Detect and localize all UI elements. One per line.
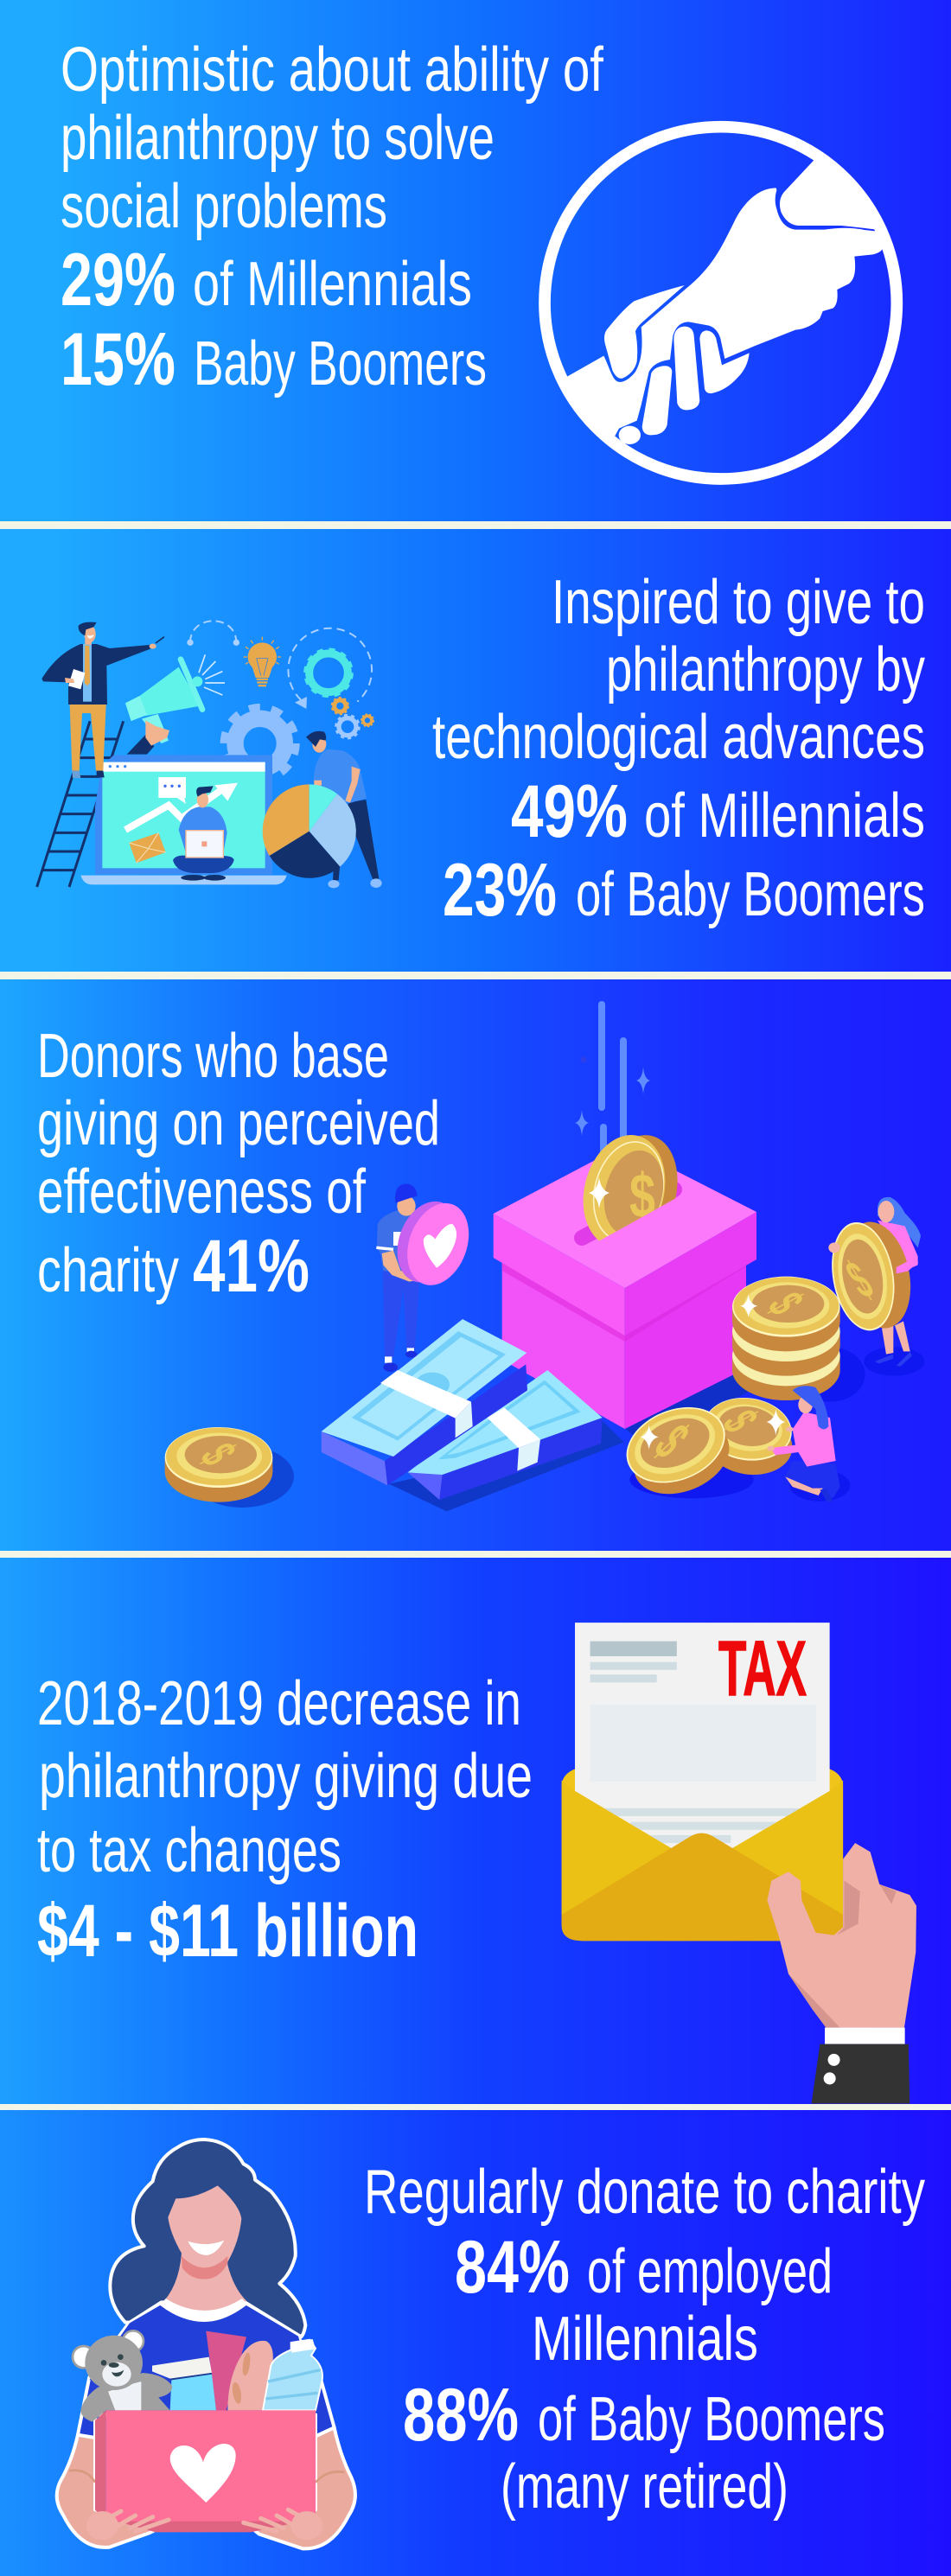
text: tax decrease statistic: philanthropy giving due (39, 1742, 533, 1811)
pink item (206, 2331, 246, 2410)
laptop (80, 755, 287, 884)
text: optimism statistics: of Millennials (193, 250, 472, 319)
text: tax decrease statistic: 2018-2019 decrease in (37, 1669, 521, 1738)
icon: big gear (224, 707, 296, 780)
text: donation statistics: 88% (403, 2374, 519, 2457)
icon: megaphone (125, 654, 225, 743)
coins and people on the right (615, 1197, 921, 1508)
coin on ground: rear (699, 1393, 796, 1480)
text: donation statistics: Millennials (532, 2305, 758, 2374)
figure: person with heart (376, 1183, 480, 1372)
panel: optimism about philanthropy (0, 0, 951, 521)
figure: man on ladder (41, 622, 164, 778)
figure: standing man (306, 731, 382, 888)
elbow creases (69, 2471, 344, 2483)
dashed arcs (190, 621, 372, 702)
figure: woman with big coin (824, 1197, 921, 1367)
text: effectiveness statistic: charity (37, 1236, 179, 1305)
chat bubble (158, 777, 186, 804)
text: optimism statistics: Baby Boomers (194, 329, 487, 399)
text: donation statistics (364, 2158, 925, 2522)
lone coin (165, 1427, 294, 1508)
shirt (78, 2304, 335, 2438)
donation box (494, 1145, 756, 1429)
text: optimism statistics: Optimistic about ability of (61, 35, 604, 105)
coin stack: $ (756, 1285, 815, 1323)
figure: sitting person with laptop (173, 786, 234, 881)
text: donation statistics: (many retired) (501, 2452, 788, 2522)
text: effectiveness statistic: effectiveness of (37, 1157, 367, 1227)
panel: technological inspiration (0, 529, 951, 972)
illustration: team with megaphone, laptop, gears and pie chart (37, 621, 382, 888)
text: tax decrease statistic (37, 1669, 533, 1973)
coin on ground: front (615, 1393, 740, 1508)
donation box (95, 2410, 316, 2532)
envelope (129, 832, 166, 863)
text: optimism statistics: philanthropy to solve (61, 104, 495, 173)
smile (188, 2241, 224, 2255)
text: donation statistics: 84% (455, 2226, 570, 2309)
icon: light bulb (244, 637, 281, 686)
text: optimism statistics (61, 35, 604, 401)
hand (767, 1843, 916, 2028)
cash stack: rear (408, 1370, 603, 1500)
panel: tax changes (0, 1558, 951, 2104)
panel: regular donations (0, 2110, 951, 2576)
text: effectiveness statistic: Donors who base (37, 1022, 389, 1091)
text: donation statistics: of employed (587, 2237, 833, 2306)
text: optimism statistics: 29% (61, 239, 176, 322)
jacket sleeve (812, 2044, 910, 2103)
water bottle (263, 2339, 322, 2410)
pie chart (263, 784, 356, 878)
cash stacks (322, 1319, 624, 1511)
shirt cuff (825, 2028, 905, 2044)
ground shadows (625, 1347, 924, 1502)
icon: teal gear (305, 650, 352, 696)
illustration: smiling woman holding donation box (57, 2139, 355, 2548)
text: optimism statistics: social problems (61, 172, 387, 241)
cash stack: front (322, 1319, 527, 1485)
text: effectiveness statistic: giving on perceived (37, 1089, 440, 1158)
teddy bear (73, 2331, 172, 2422)
envelope back (562, 1768, 843, 1941)
text: optimism statistics: 15% (61, 318, 176, 401)
shirt collar (160, 2299, 247, 2322)
coin on ground: rear: $ (711, 1402, 770, 1440)
text: effectiveness statistic: 41% (193, 1225, 310, 1308)
figure: woman with big coin: $ (836, 1251, 883, 1309)
TAX label: TAX (718, 1626, 807, 1712)
text: technology statistics: 23% (443, 849, 557, 932)
text: technology statistics: 49% (511, 770, 628, 853)
hands (86, 2509, 322, 2540)
coin on ground: front: $ (642, 1413, 700, 1470)
panel: effectiveness of charity (0, 979, 951, 1551)
coin entering slot: $ (629, 1162, 655, 1231)
figure: kneeling woman (767, 1386, 840, 1502)
face and neck (160, 2185, 246, 2314)
icon: helping hands in a circle (545, 127, 897, 479)
sparkle on coin (589, 1177, 610, 1208)
coin stack (732, 1277, 840, 1400)
lone coin: $ (189, 1435, 248, 1473)
neck shadow (182, 2256, 227, 2280)
illustration: tax envelope held in hand (562, 1623, 916, 2103)
rising arrow (125, 783, 238, 830)
tax letter (575, 1623, 830, 1866)
bread (227, 2341, 273, 2410)
falling lines and sparkles (575, 1001, 650, 1155)
coin entering slot (583, 1135, 678, 1241)
figure: arm holding megaphone (127, 720, 169, 755)
arms (57, 2427, 355, 2548)
book (152, 2357, 216, 2410)
text: tax decrease statistic: $4 - $11 billion (37, 1890, 418, 1973)
hair (110, 2139, 305, 2337)
text: effectiveness statistic (37, 1022, 440, 1308)
illustration: donation box, coins, cash and people (165, 1001, 924, 1511)
ladder (37, 721, 124, 887)
icon: small gears (332, 698, 373, 738)
text: tax decrease statistic: to tax changes (37, 1816, 341, 1885)
shirt front over hair (89, 2305, 303, 2380)
text: technology statistics (432, 568, 925, 932)
envelope flaps (562, 1780, 843, 1941)
